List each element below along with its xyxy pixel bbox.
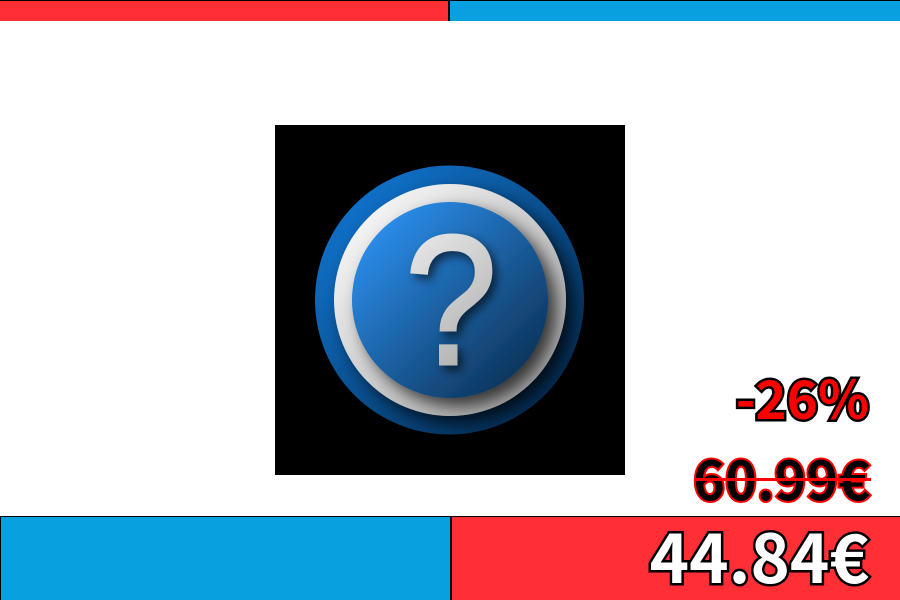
bottom bar: blue panel [0,516,450,600]
strikethrough line [694,478,871,481]
top bar divider [448,0,450,21]
product image: question mark icon [275,125,625,475]
original price with strikethrough [693,437,872,516]
background panel [275,125,625,475]
top bar: red segment [0,0,448,21]
inner blue disc [352,202,548,398]
bottom bar: red panel [452,516,900,600]
question mark: ? [405,198,497,404]
silver ring [334,184,566,416]
bottom bar divider [450,516,452,600]
original price: 60.99€ [693,437,870,516]
top bar: blue segment [450,0,900,21]
discount percentage: -26% [736,359,869,435]
outer blue disc [315,166,584,434]
